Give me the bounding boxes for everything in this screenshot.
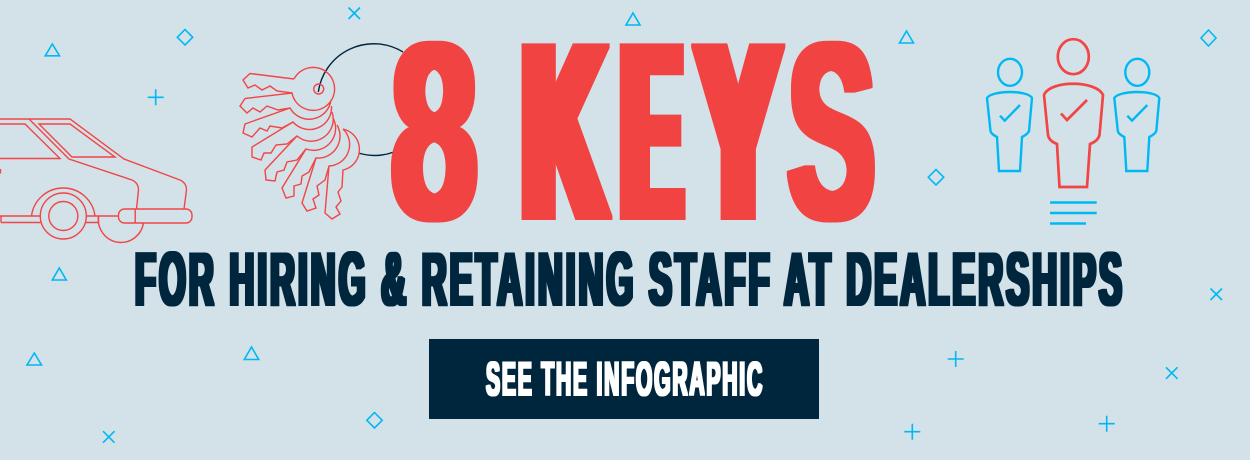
person: centre (1044, 39, 1103, 187)
person: right (1114, 59, 1159, 171)
icon: car (0, 119, 192, 242)
decorative triangles (27, 13, 914, 365)
icon: key ring (318, 44, 403, 155)
button (429, 339, 819, 419)
decorative diamonds (177, 30, 1216, 428)
title (391, 0, 875, 272)
title: 8 (391, 0, 478, 272)
icon: people with checkmarks (987, 39, 1159, 224)
icon: keys (240, 67, 359, 219)
button: SEE THE INFOGRAPHIC (486, 352, 764, 405)
title: K (523, 0, 605, 272)
person: left (987, 59, 1032, 171)
decorative plus signs (148, 89, 1115, 440)
icon: text lines (1050, 202, 1097, 224)
title: S (788, 0, 875, 272)
